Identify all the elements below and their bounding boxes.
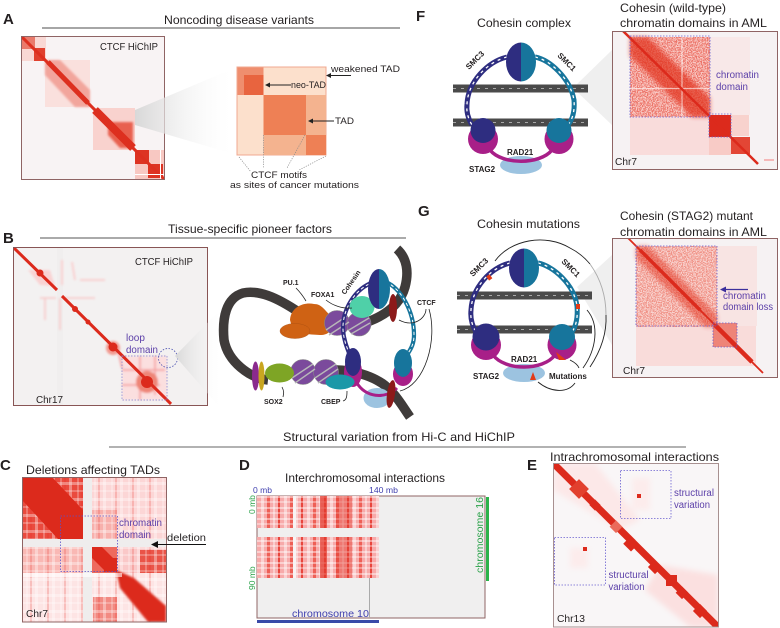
arrow: domain loss (720, 286, 748, 292)
factor labels (264, 270, 436, 406)
axis labels (247, 485, 398, 590)
label: Chr7: Chr7 (615, 157, 637, 168)
panel letter B: B (3, 230, 14, 247)
label: CTCF HiChIP: CTCF HiChIP (100, 42, 158, 53)
heatmap: chromosome 10 vs 16 (257, 496, 485, 618)
labels: subunits (468, 256, 587, 381)
label: Chr7: Chr7 (623, 366, 645, 377)
heading: wild-type heatmap: Cohesin (wild-type) (620, 1, 726, 15)
heading: structural variation: Structural variation from Hi-C and HiChIP (283, 430, 515, 444)
chromatin fibre (224, 249, 410, 417)
label: CTCF HiChIP: CTCF HiChIP (135, 257, 193, 268)
arrow and label: neo-TAD (265, 80, 326, 91)
callout lines (282, 288, 432, 401)
panel: D interchromosomal interactions (239, 457, 489, 623)
dashed circle: loop (158, 348, 178, 368)
arrow and label: TAD: TAD (335, 116, 354, 127)
heading: wild-type heatmap: chromatin domains in AML (620, 16, 767, 30)
label: chromatin domain: chromatin (119, 518, 162, 529)
mutation marks (486, 274, 580, 380)
label: chromatin domain loss: domain loss (723, 302, 773, 313)
CTCF protein (389, 294, 397, 322)
factor labels: PU.1 (283, 280, 299, 287)
factor labels: SOX2 (264, 399, 283, 406)
dashed box: loop domain (122, 356, 167, 400)
heatmap: Chr7 wild-type (612, 31, 778, 170)
labels: subunits: SMC3 (468, 256, 491, 278)
factor labels: FOXA1 (311, 292, 334, 299)
factor labels: CTCF (417, 300, 436, 307)
callout lines to CTCF motifs (239, 135, 326, 172)
panel letter F: F (416, 8, 425, 25)
panel: B tissue-specific pioneer factors (3, 222, 436, 417)
mutation arrows (495, 240, 606, 390)
labels: subunits: RAD21 (507, 148, 534, 157)
protein: SOX2 (265, 364, 294, 382)
dashed box: chromatin domain (60, 516, 118, 572)
labels: subunits: STAG2 (473, 372, 500, 381)
label: CTCF motifs as sites of cancer mutations: as sites of cancer mutations (230, 180, 359, 191)
labels: subunits: STAG2 (469, 165, 496, 174)
arrow and label: neo-TAD: neo-TAD (291, 80, 326, 91)
panel letter C: C (0, 457, 11, 474)
arrow and label: weakened TAD (326, 64, 400, 78)
panel letter E: E (527, 457, 537, 474)
label: loop domain: domain (126, 345, 158, 356)
label: Chr7: Chr7 (26, 609, 48, 620)
lower cohesin heads (344, 348, 413, 408)
label: chromosome 16: chromosome 16 (474, 497, 486, 573)
axis labels: 140 mb (369, 485, 398, 495)
diagram: cohesin ring (453, 42, 588, 174)
heading: noncoding disease variants: Noncoding disease variants (164, 13, 314, 27)
panel: F cohesin complex (416, 1, 778, 174)
axis labels: 0 mb (253, 485, 272, 495)
panel letter D: D (239, 457, 250, 474)
heading: STAG2 mutant heatmap: chromatin domains in AML (620, 225, 767, 239)
protein: FOXA1 (350, 296, 374, 318)
zoom wedge A (135, 67, 237, 155)
panel letter A: A (3, 11, 14, 28)
zoom wedge B (175, 308, 222, 410)
label: structural variation upper: variation (674, 500, 710, 511)
protein: PU.1 (280, 304, 334, 338)
nucleosomes (290, 310, 371, 384)
arrow and label: deletion: deletion (167, 533, 206, 544)
schematic: TAD diagram (237, 67, 326, 172)
cohesin head (368, 269, 390, 309)
labels: subunits (464, 49, 578, 174)
panel: E intrachromosomal interactions (527, 450, 719, 627)
label: structural variation upper: structural (674, 488, 714, 499)
zoom wedge G (577, 255, 612, 345)
arrow and label: deletion (151, 533, 206, 548)
labels: subunits: SMC3 (464, 49, 487, 71)
heatmap: deletions Chr7 (22, 477, 166, 622)
axis labels: 90 mb (247, 566, 257, 590)
heading: deletions affecting TADs: Deletions affecting TADs (26, 463, 160, 477)
label: chromosome 10: chromosome 10 (292, 608, 369, 620)
labels: subunits: SMC1 (556, 51, 578, 74)
panel: G cohesin mutations (418, 203, 778, 390)
dashed boxes: structural variation (554, 470, 671, 585)
label: structural variation lower: structural (608, 570, 648, 581)
heading: intrachromosomal interactions: Intrachromosomal interactions (550, 450, 719, 464)
diagram: chromatin loop with factors (224, 249, 436, 417)
protein: CBEP (326, 374, 354, 390)
heatmap: CTCF HiChIP A (21, 36, 164, 180)
insulator proteins (252, 362, 264, 390)
heatmap: Chr13 (553, 463, 718, 627)
labels: subunits: SMC1 (560, 257, 582, 280)
labels: subunits: RAD21 (511, 355, 538, 364)
label: structural variation lower: variation (608, 582, 644, 593)
panel: A noncoding disease variants (3, 11, 400, 191)
label: loop domain: loop (126, 333, 145, 344)
arrow and label: TAD (308, 116, 354, 127)
heatmap: CTCF HiChIP B (13, 247, 208, 406)
factor labels: CBEP (321, 399, 341, 406)
panel letter G: G (418, 203, 430, 220)
heatmap: Chr7 STAG2 mutant (612, 238, 778, 378)
heading: cohesin complex: Cohesin complex (477, 16, 571, 30)
diagram: cohesin ring with mutations (457, 240, 606, 390)
second CTCF protein (385, 380, 397, 408)
label: chromatin domain: domain (716, 82, 748, 93)
label: chromatin domain: chromatin (716, 70, 759, 81)
label: Chr13: Chr13 (557, 614, 585, 625)
label: CTCF motifs as sites of cancer mutations: CTCF motifs (251, 170, 307, 181)
heading: interchromosomal interactions: Interchromosomal interactions (285, 471, 445, 485)
label: chromatin domain loss: chromatin (723, 291, 766, 302)
zoom wedge F (573, 50, 612, 125)
dashed box: chromatin domain (630, 36, 731, 137)
panel: C deletions affecting TADs (0, 457, 206, 622)
labels: subunits: Mutations (549, 372, 587, 381)
label: chromatin domain: domain (119, 530, 151, 541)
heading: cohesin mutations: Cohesin mutations (477, 217, 580, 231)
dashed box: chromatin domain (636, 246, 737, 347)
heading: tissue-specific pioneer factors: Tissue-specific pioneer factors (168, 222, 332, 236)
label: Chr17: Chr17 (36, 395, 63, 406)
arrow and label: weakened TAD: weakened TAD (330, 64, 400, 75)
cohesin ring strands (343, 282, 414, 358)
label: chromosome 10 (257, 608, 379, 623)
heading: STAG2 mutant heatmap: Cohesin (STAG2) mutant (620, 209, 754, 223)
axis labels: 0 mb (247, 495, 257, 514)
factor labels: Cohesin (341, 270, 362, 296)
